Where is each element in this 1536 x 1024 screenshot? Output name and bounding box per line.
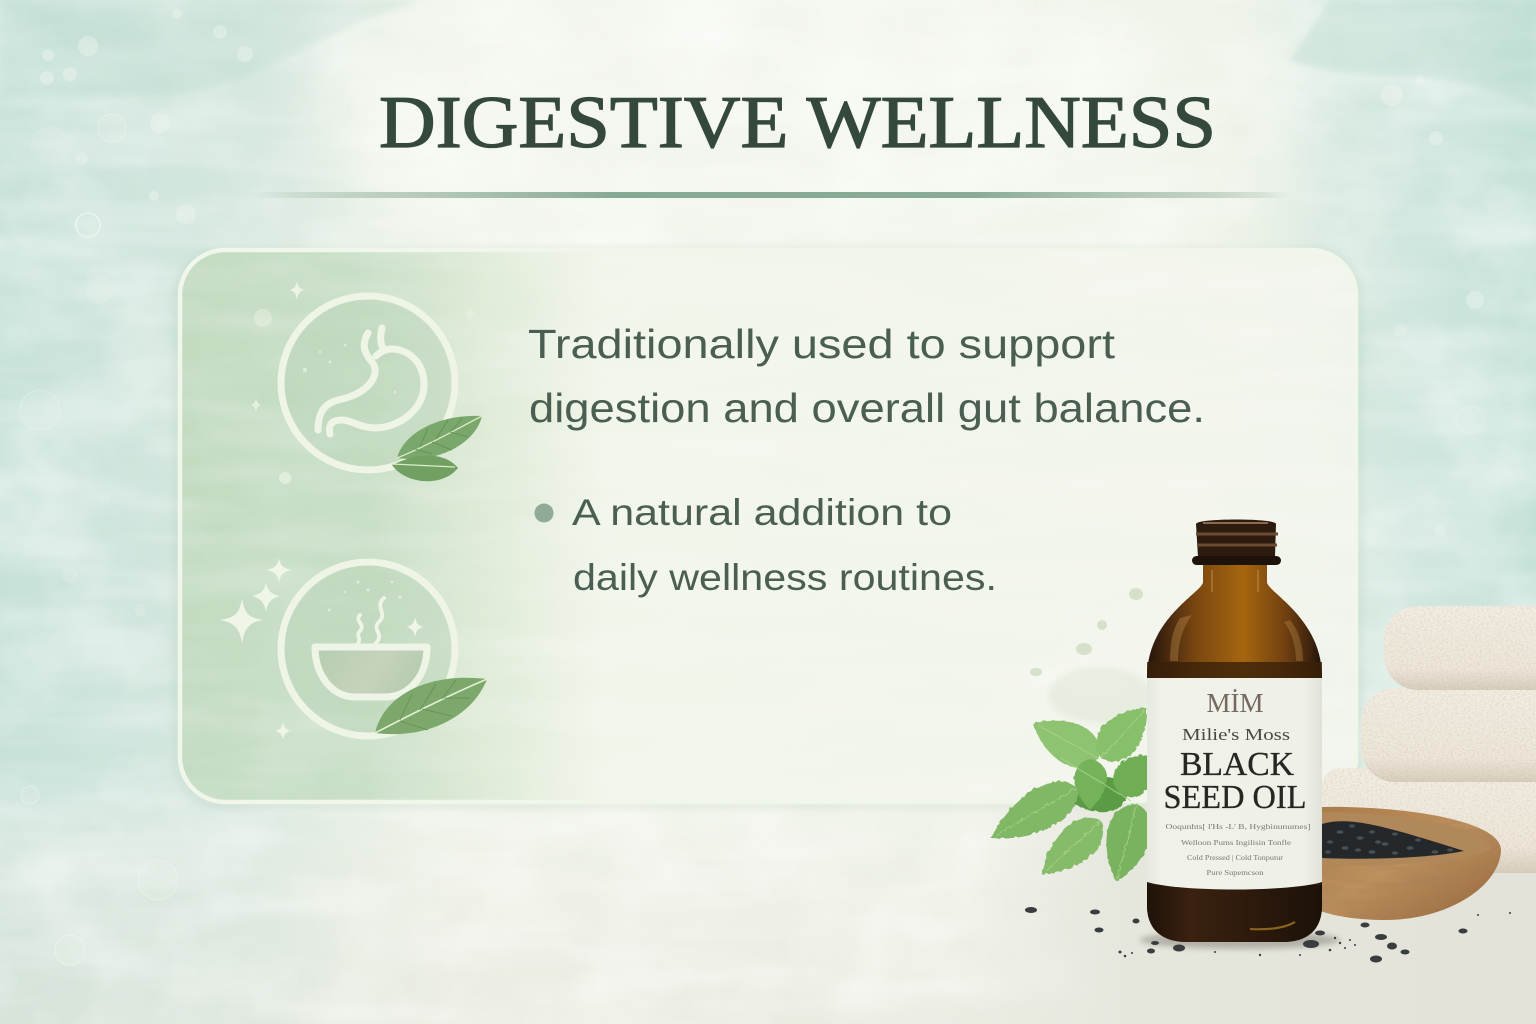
text: bullet point xyxy=(534,492,997,598)
icon: stomach in circle xyxy=(281,296,455,470)
paint speckles near bottle xyxy=(1030,588,1152,723)
icon: leaves on stomach circle xyxy=(392,416,482,481)
icon: sparkles xyxy=(219,281,478,740)
text: main statement: digestion and overall gut balance. xyxy=(529,385,1205,431)
label text: fine print xyxy=(1166,823,1310,877)
label text: product name xyxy=(1164,746,1306,816)
label text: fine print: Cold Pressed | Cold Tonputur xyxy=(1187,854,1284,862)
towel: top xyxy=(1384,606,1536,690)
text: main statement: Traditionally used to support xyxy=(528,321,1116,367)
label text: product name: SEED OIL xyxy=(1164,779,1306,816)
bottle cap threads xyxy=(1192,520,1281,565)
label text: fine print: Ooqunhts[ l'Hs -L' B, Hygbinunumes] xyxy=(1166,823,1310,831)
scattered black seeds xyxy=(1025,907,1511,962)
towel: middle xyxy=(1361,688,1536,782)
mint leaves xyxy=(979,693,1164,888)
title: DIGESTIVE WELLNESS xyxy=(379,82,1216,164)
glass highlights xyxy=(1170,615,1192,661)
panel: digestive benefits xyxy=(172,246,1364,810)
text: bullet point: A natural addition to xyxy=(572,492,952,533)
bottle label xyxy=(1147,678,1322,890)
bottle xyxy=(1147,520,1322,942)
text: bullet point: daily wellness routines. xyxy=(573,557,997,598)
panel background xyxy=(172,246,1364,810)
text: main statement xyxy=(528,321,1205,431)
label text: fine print: Pure Supemcson xyxy=(1206,869,1264,877)
bottle glass xyxy=(1147,560,1322,942)
label text: logo: MİM xyxy=(1206,688,1264,718)
icon: bowl in circle xyxy=(281,562,455,736)
label text: fine print: Welloon Pums Ingilisin Tonfle xyxy=(1181,839,1291,847)
label text: product name: BLACK xyxy=(1180,746,1294,783)
label text: brand: Milie's Moss xyxy=(1182,725,1290,744)
table surface xyxy=(960,803,1536,1024)
title divider xyxy=(250,192,1290,198)
decorative bubbles left xyxy=(20,9,253,965)
towel: bottom xyxy=(1322,768,1536,873)
decorative bubbles right xyxy=(1381,75,1516,536)
icon: leaf on bowl circle xyxy=(375,678,487,734)
seed shadow under bottle xyxy=(1140,931,1340,949)
wooden bowl with black seeds xyxy=(1322,806,1501,920)
towels xyxy=(1322,606,1536,873)
